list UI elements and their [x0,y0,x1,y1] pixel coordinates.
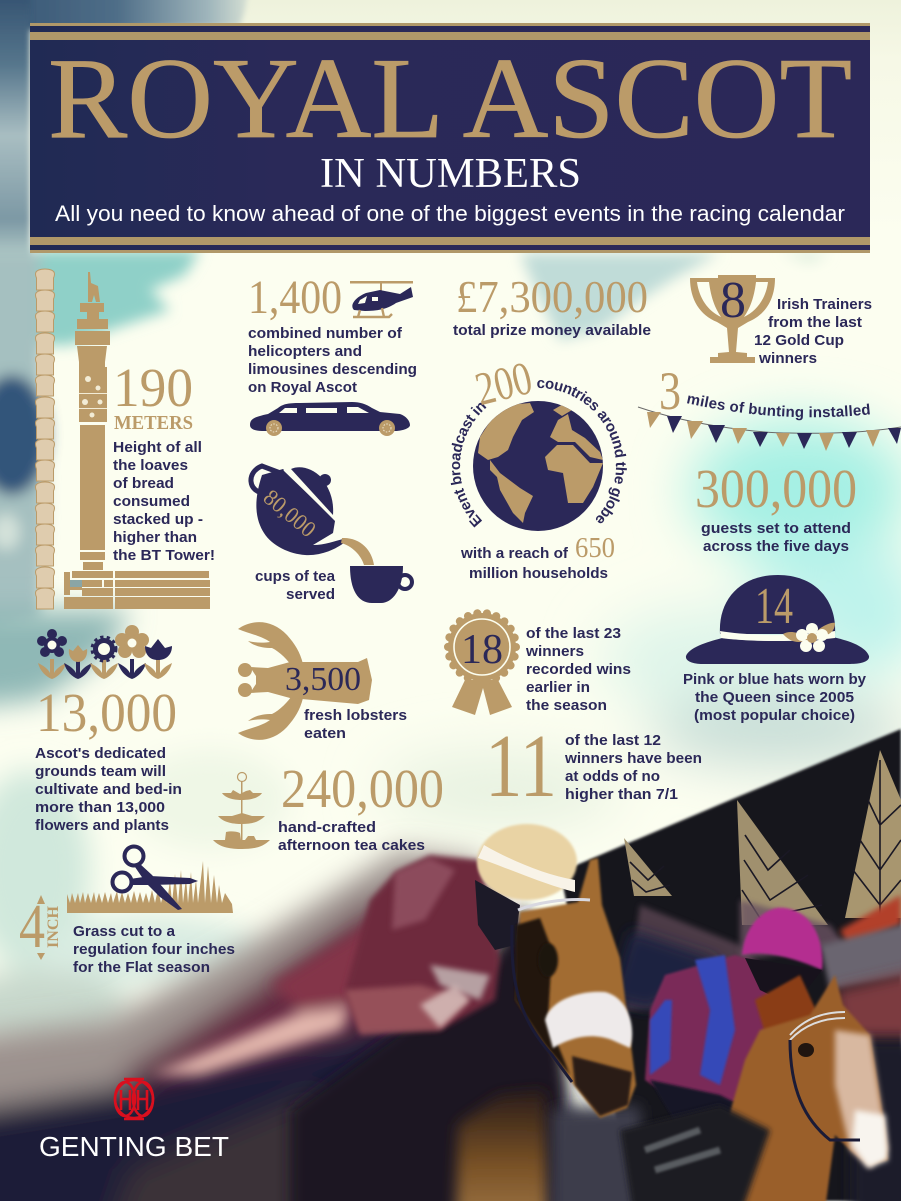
text: bread height description: Height of all [113,439,202,456]
stat: 1,400 helicopters and limousines: combined number of [248,325,403,342]
stat: £7,300,000 prize money: £7,300,000 [456,271,648,322]
text: bread height description: the loaves [113,457,188,474]
icon: trophy [690,272,775,363]
subtitle: All you need to know ahead of one of the biggest events in the racing calendar [55,201,845,226]
stat: £7,300,000 prize money: total prize money available [453,322,651,339]
stat: 240,000 tea cakes: hand-crafted [278,819,376,836]
stat: 4 inch grass: Grass cut to a [73,923,176,940]
stat: 11 winners odds: 11 [485,717,557,816]
stat: 8 Irish trainers with trophy: Irish Trainers [777,296,872,313]
stat: 1,400 helicopters and limousines: 1,400 [248,271,342,324]
stripes [30,23,870,253]
left horse neck [290,905,650,1201]
stat: 11 winners odds: of the last 12 [565,732,661,749]
text: bread height description: of bread [113,475,174,492]
stat: broadcast in 200 countries: 650 [575,533,615,564]
stat: 80,000 cups of tea [251,466,412,603]
logo: Genting Bet [39,1079,229,1162]
stat: 240,000 tea cakes: 240,000 [281,758,444,819]
logo: Genting Bet: GENTING BET [39,1131,229,1162]
number: 200: 200 [470,352,537,416]
right jockey [645,908,825,1140]
stat: 240,000 tea cakes [213,758,444,854]
icon: pouring tea [341,538,374,565]
icon: lobster [238,622,372,740]
stat: 1,400 helicopters and limousines: limousines descending [248,361,417,378]
stat: 13,000 flowers: 13,000 [36,682,177,743]
grandstand [560,729,901,1201]
stat: 3,500 lobsters: eaten [304,725,346,742]
stat: 190 meters [113,357,215,564]
stat: 11 winners odds: winners have been [564,750,702,767]
stat: 1,400 helicopters and limousines: on Royal Ascot [248,379,357,396]
stat: 14 hats: Pink or blue hats worn by [683,671,867,688]
left jockey [345,824,577,1035]
stat: 190 meters: METERS [114,412,193,434]
right horse [620,975,888,1201]
stat: 13,000 flowers: more than 13,000 [35,799,165,816]
curved text: event broadcast in: Event broadcast in [450,402,486,528]
stat: 18 winners with rosette: of the last 23 [526,625,621,642]
icon: trophy: 8 [720,272,746,329]
stat: 80,000 cups of tea: served [286,586,335,603]
stat: 3 miles of bunting: 3 [659,361,681,421]
stat: 300,000 guests: guests set to attend [701,520,851,537]
icon: grass [67,861,233,913]
icon: rosette [448,613,516,715]
text: bread height description: the BT Tower! [113,547,215,564]
icon: stack of bread loaves [36,269,54,609]
curved text: countries around the globe: countries around the globe [537,380,627,524]
icon: teapot: 80,000 [259,485,321,542]
heading: in numbers: IN NUMBERS [320,151,581,197]
stat: 8 Irish trainers with trophy [690,272,872,367]
stat: 3 miles of bunting [638,361,901,451]
stat: 4 inch grass: INCH [45,905,62,948]
icon: globe [473,401,603,531]
stat: 18 winners with rosette [448,613,631,715]
stat: 13,000 flowers: Ascot's dedicated [35,745,166,762]
stat: 18 winners with rosette: earlier in [526,679,590,696]
stat: 4 inch grass: 4 [19,893,45,961]
stat: 8 Irish trainers with trophy: 12 Gold Cup [754,332,844,349]
stat: 80,000 cups of tea: cups of tea [255,568,336,585]
icon: scissors [112,846,198,910]
stat: 14 hats: the Queen since 2005 [695,689,854,706]
icon: hat: 14 [755,578,793,635]
stat: 13,000 flowers: cultivate and bed-in [35,781,182,798]
stat: broadcast in 200 countries [450,352,627,582]
icon: lobster: 3,500 [285,661,361,698]
text: bread height description: higher than [113,529,197,546]
icon: rosette: 18 [461,627,503,673]
stat: 11 winners odds [485,717,702,816]
sky to dark wedge streaks [0,850,660,1201]
stat: 13,000 flowers: flowers and plants [35,817,169,834]
icon: helicopter [350,281,413,317]
heading: Royal Ascot: ROYAL ASCOT [48,35,852,163]
stat: 240,000 tea cakes: afternoon tea cakes [278,837,425,854]
stat: 4 inch grass: for the Flat season [73,959,210,976]
icon: limousine [250,402,410,436]
stat: 3,500 lobsters [238,622,407,742]
stat: 3,500 lobsters: fresh lobsters [304,707,407,724]
stat: 18 winners with rosette: the season [526,697,607,714]
left horse head [512,858,636,1118]
icon: bunting flags [638,407,901,451]
stat: 11 winners odds: higher than 7/1 [565,786,678,803]
stat: 3 miles of bunting: miles of bunting installed [687,395,870,420]
stat: broadcast in 200 countries: with a reach of [460,545,569,562]
stat: broadcast in 200 countries: million households [469,565,608,582]
text: bread height description: consumed [113,493,190,510]
stat: 4 inch grass [19,846,235,976]
stat: 18 winners with rosette: winners [525,643,584,660]
stat: 1,400 helicopters and limousines [248,271,417,436]
stat: 11 winners odds: at odds of no [565,768,660,785]
icon: hat [686,575,869,664]
stat: 300,000 guests: across the five days [703,538,849,555]
icon: BT Tower [64,272,210,609]
stat: 13,000 flowers [35,625,182,834]
icon: row of flowers [37,625,172,679]
stat: 18 winners with rosette: recorded wins [526,661,631,678]
stat: 14 hats: (most popular choice) [694,707,855,724]
stat: 300,000 guests: 300,000 [695,458,857,519]
icon: teacup [350,566,412,603]
text: bread height description: stacked up - [113,511,203,528]
stat: 14 hats [683,575,869,724]
icon: cake stand [213,772,270,849]
title panel [30,23,870,253]
stat: 300,000 guests [695,458,857,555]
text: bread height description [113,439,215,564]
stat: 8 Irish trainers with trophy: winners [758,350,817,367]
stat: 13,000 flowers: grounds team will [35,763,166,780]
stat: 190 meters: 190 [113,357,193,418]
stat: 4 inch grass: regulation four inches [73,941,235,958]
stat: 8 Irish trainers with trophy: from the last [768,314,862,331]
stat: 1,400 helicopters and limousines: helicopters and [248,343,362,360]
icon: teapot [251,466,345,555]
